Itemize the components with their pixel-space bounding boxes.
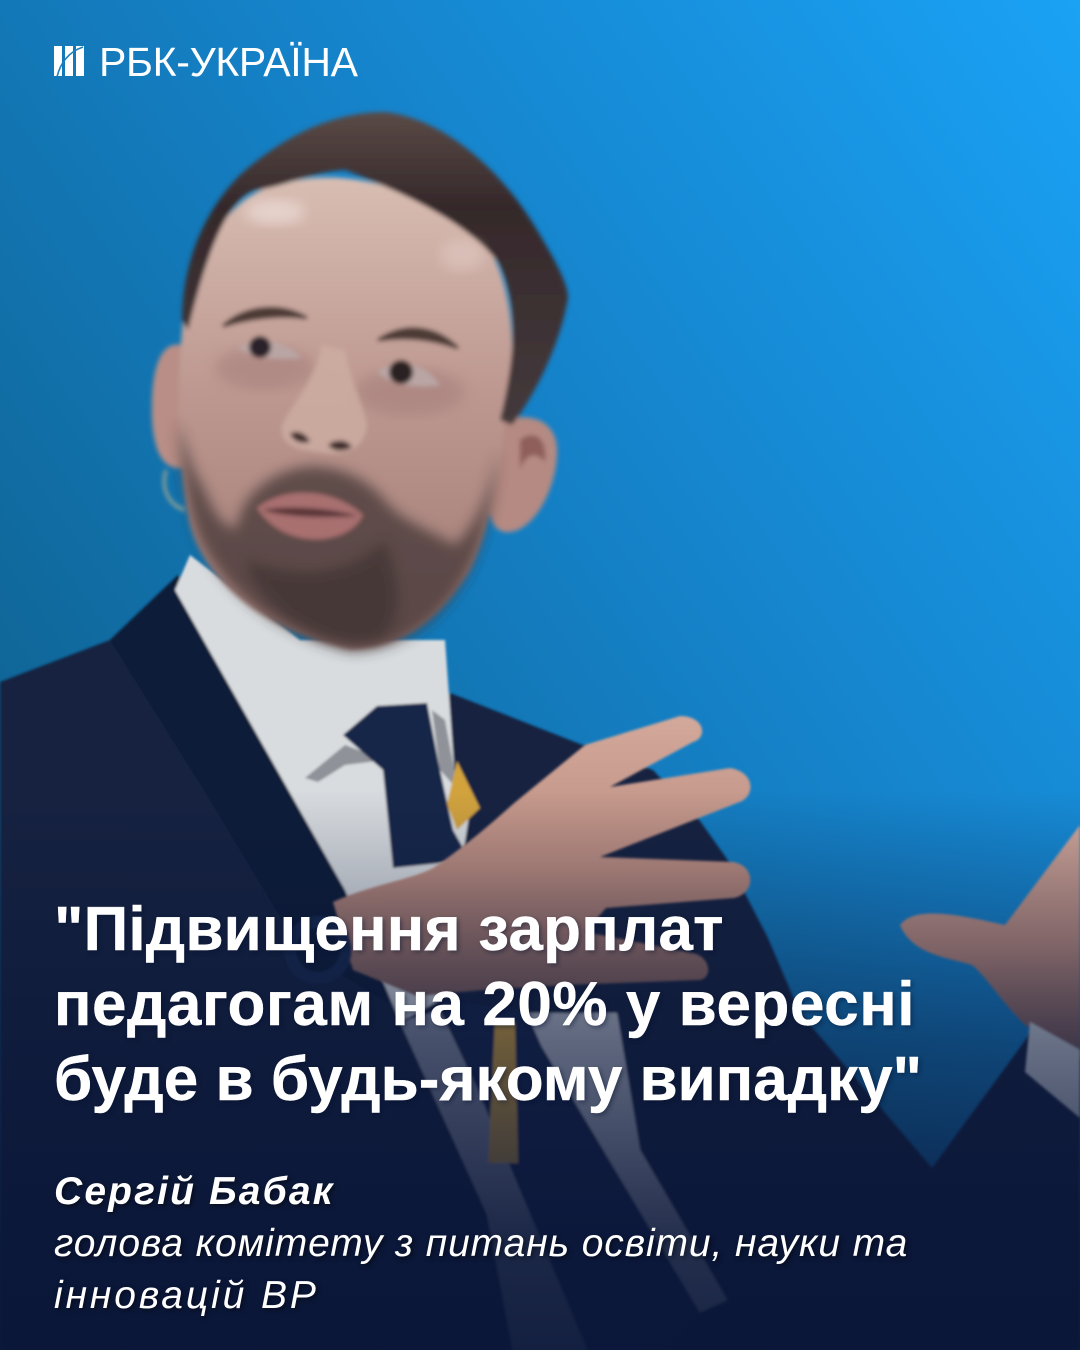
attribution: голова комітету з питань освіти, науки та (54, 1222, 908, 1265)
quote heading (54, 895, 922, 1116)
nose (282, 345, 367, 454)
eyes (238, 341, 302, 359)
logo wordmark: РБК-УКРАЇНА (99, 39, 358, 85)
tie (343, 703, 470, 868)
forehead highlights (245, 199, 305, 225)
left hand with watch (333, 716, 750, 996)
brows (223, 308, 458, 348)
cuff (1025, 1022, 1080, 1118)
bottom overlay (0, 790, 1080, 1350)
attribution: інновацій ВР (54, 1274, 319, 1317)
earpiece (164, 470, 184, 510)
shirt (175, 555, 470, 1022)
ears (152, 344, 182, 468)
head (152, 112, 568, 652)
lanyard (447, 761, 480, 830)
logo (54, 39, 358, 85)
face (179, 177, 512, 650)
eye socket shading (215, 346, 315, 390)
beard (178, 420, 498, 652)
icon: logo mark (54, 46, 84, 76)
quote heading: "Підвищення зарплат (54, 895, 724, 964)
attribution: Сергій Бабак (54, 1170, 335, 1213)
quote heading: педагогам на 20% у вересні (54, 970, 915, 1039)
right hand (900, 825, 1080, 1052)
hair (182, 112, 568, 425)
attribution (54, 1170, 908, 1318)
collar shadow (305, 710, 458, 790)
quote heading: буде в будь-якому випадку" (54, 1045, 922, 1114)
mouth (257, 493, 363, 539)
jacket (0, 575, 1080, 1350)
